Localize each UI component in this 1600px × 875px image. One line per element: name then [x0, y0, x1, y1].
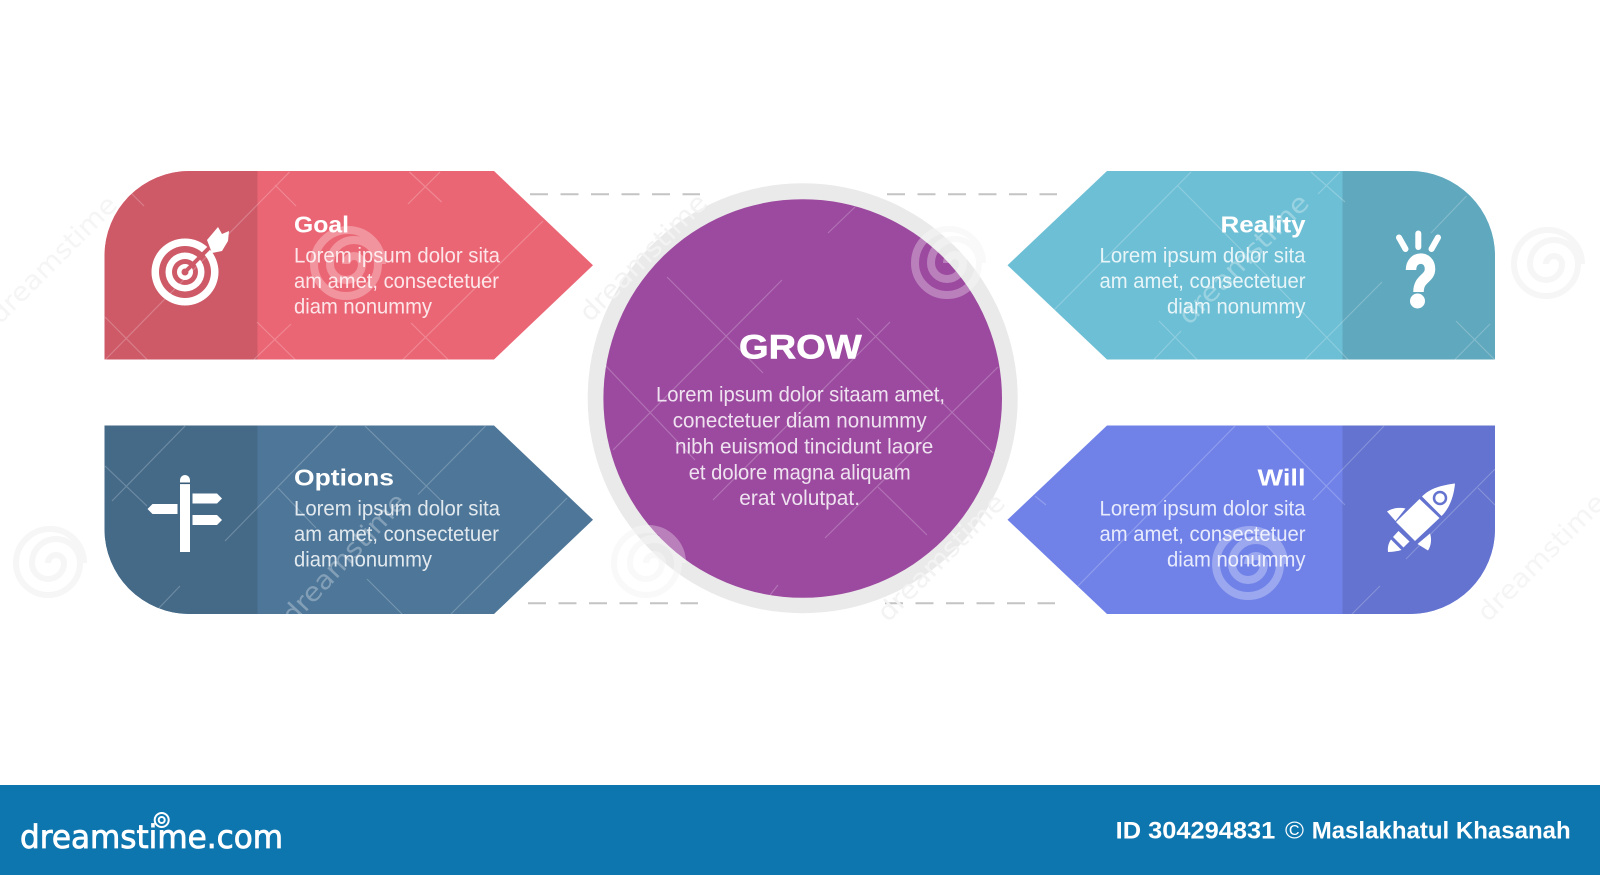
circle outer ring [588, 183, 1018, 613]
footer author name: Maslakhatul Khasanah [1312, 817, 1571, 844]
reality arrow body [1008, 171, 1495, 360]
footer band [0, 785, 1600, 875]
reality description: am amet, consectetuer [1100, 270, 1306, 293]
dashed connector lines [528, 194, 1057, 603]
goal description [294, 244, 500, 318]
central description: nibh euismod tincidunt laore [675, 435, 933, 458]
icon: signpost [148, 475, 222, 552]
central heading: GROW [739, 328, 863, 366]
watermark spirals on the white background [16, 229, 1582, 595]
watermark diagonal wordmarks: dreamstime [1472, 488, 1600, 628]
goal icon band [104, 171, 258, 360]
reality heading: Reality [1220, 212, 1306, 238]
panel: Options [104, 426, 593, 614]
central description: et dolore magna aliquam [689, 461, 911, 484]
will icon band [1342, 426, 1495, 614]
reality icon band [1342, 171, 1495, 360]
will description: am amet, consectetuer [1100, 523, 1306, 546]
will description: Lorem ipsum dolor sita [1100, 498, 1306, 520]
reality description: diam nonummy [1167, 296, 1306, 318]
circle fill [603, 199, 1002, 598]
central description [656, 384, 945, 510]
goal heading: Goal [294, 212, 349, 238]
central description: conectetuer diam nonummy [673, 410, 927, 432]
central description: erat volutpat. [739, 487, 860, 510]
central description: Lorem ipsum dolor sitaam amet, [656, 384, 945, 407]
panel: Will [1008, 426, 1495, 614]
icon: question mark with rays [1399, 234, 1438, 308]
options description: diam nonummy [294, 548, 432, 572]
watermark diagonal wordmarks: dreamstime [276, 487, 413, 631]
will heading: Will [1258, 464, 1306, 490]
panel: central GROW circle [588, 183, 1018, 613]
options description: am amet, consectetuer [294, 523, 499, 546]
watermark diagonal wordmarks [0, 188, 1600, 631]
icon: target with dart [152, 227, 229, 306]
will description: diam nonummy [1167, 548, 1306, 572]
footer image id: ID 304294831 [1116, 817, 1275, 844]
options arrow body [104, 426, 593, 614]
will arrow body [1008, 426, 1495, 614]
watermark diagonal wordmarks: dreamstime [1173, 188, 1316, 331]
goal description: Lorem ipsum dolor sita [294, 244, 500, 268]
options icon band [104, 426, 258, 614]
watermark diagonal wordmarks: dreamstime [872, 488, 1012, 628]
watermark diagonal wordmarks: dreamstime [574, 188, 714, 328]
watermark cross lines [105, 172, 1495, 614]
goal description: am amet, consectetuer [294, 270, 499, 293]
options description [294, 498, 500, 572]
panel: Reality [1008, 171, 1495, 360]
goal arrow body [104, 171, 593, 360]
reality description [1100, 244, 1306, 318]
panel: Goal [104, 171, 593, 360]
footer copyright symbol: © [1285, 817, 1304, 844]
reality description: Lorem ipsum dolor sita [1100, 244, 1306, 268]
options description: Lorem ipsum dolor sita [294, 498, 500, 520]
icon: footer logo spiral [155, 813, 169, 827]
footer logo wordmark: dreamstime.com [20, 818, 283, 856]
watermark spirals over the shapes [314, 229, 1284, 596]
will description [1100, 498, 1306, 572]
icon: rocket [1387, 484, 1455, 552]
options heading: Options [294, 464, 394, 490]
goal description: diam nonummy [294, 296, 432, 318]
